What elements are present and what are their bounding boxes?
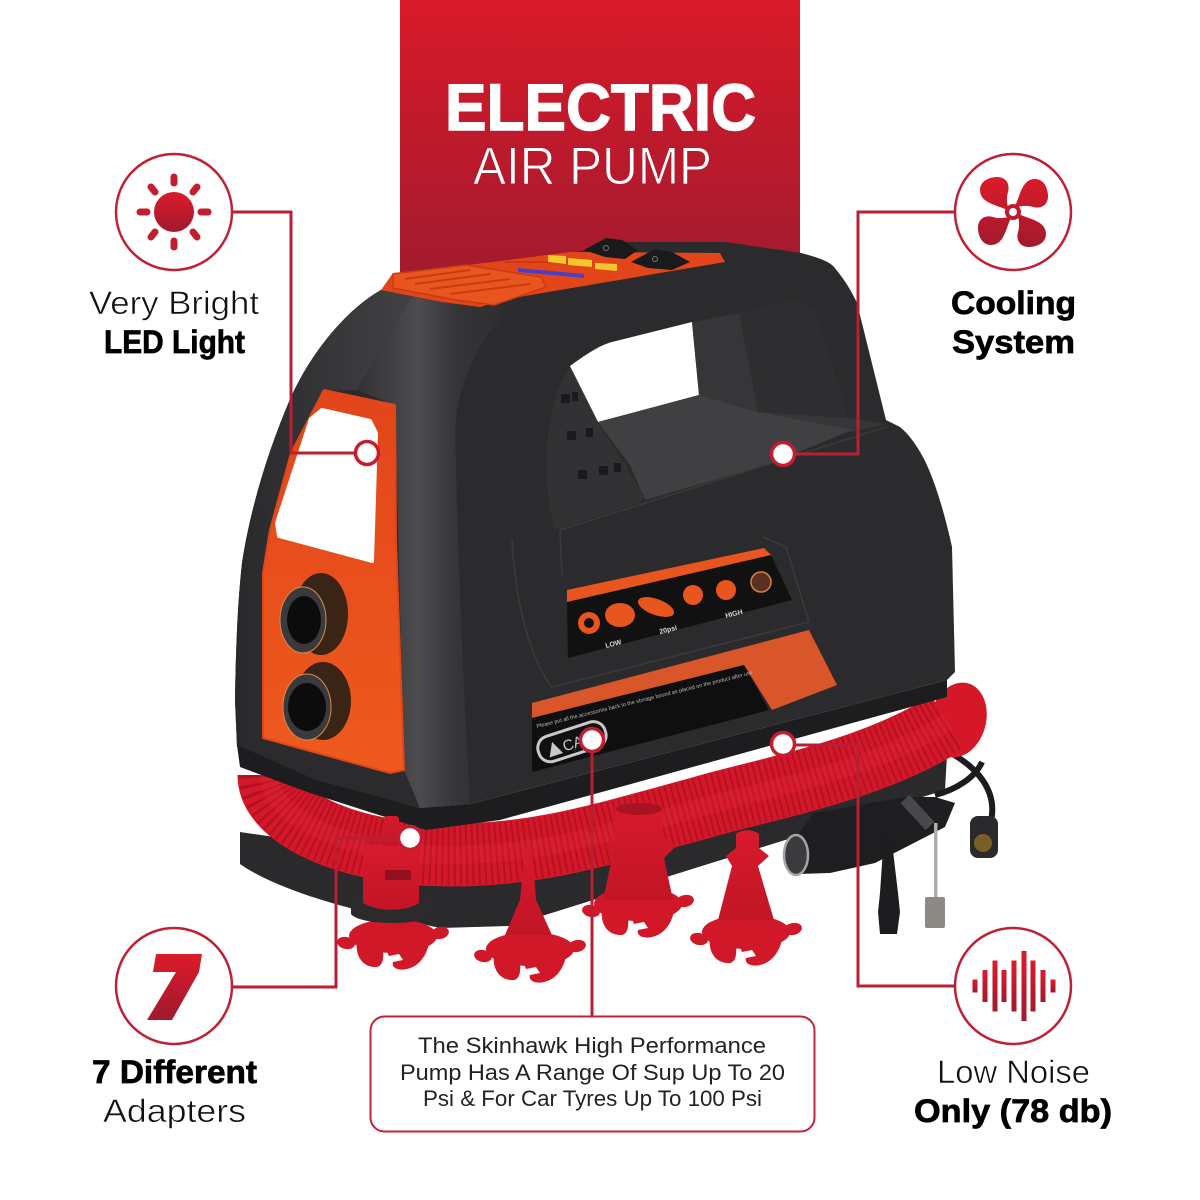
connector: low noise <box>772 732 955 986</box>
feature: cooling system <box>951 154 1076 360</box>
LED lens <box>277 410 376 561</box>
handle opening <box>570 322 699 422</box>
label: LED Light <box>104 324 245 360</box>
upper product label: 20psi <box>659 625 678 636</box>
icon: seven <box>116 928 232 1044</box>
needle valve <box>925 823 945 928</box>
connector: cooling system <box>772 212 955 466</box>
feature: adapters <box>92 928 257 1129</box>
body highlight <box>357 293 520 808</box>
grip tray <box>393 265 546 305</box>
subtitle: air pump: AIR PUMP <box>473 137 712 196</box>
orange front panel <box>263 390 404 773</box>
yellow buttons <box>548 255 617 271</box>
connector: LED light <box>232 212 378 464</box>
adapter 1 <box>336 816 450 970</box>
cone nozzle <box>878 834 900 934</box>
hose connector <box>970 816 998 858</box>
upper product label: HIGH <box>725 609 743 620</box>
vent panel <box>547 367 645 530</box>
icon: sound wave <box>955 928 1071 1044</box>
upper product label <box>567 548 792 658</box>
adapter 3 <box>581 803 695 938</box>
car plug <box>784 797 955 875</box>
connector: adapters <box>232 826 422 987</box>
label <box>914 1054 1112 1129</box>
label: 7 Different <box>92 1054 257 1090</box>
feature: low noise <box>914 928 1112 1129</box>
caution badge: CAU <box>561 729 596 755</box>
upper product label: LOW <box>605 639 623 650</box>
label: Low Noise <box>937 1054 1090 1090</box>
lower product label: Please put all the accessories back to the storage bound as placed on the product after use <box>536 670 753 730</box>
label: Adapters <box>103 1093 246 1129</box>
rocker switch 1 <box>584 238 638 259</box>
icon: sun <box>116 154 232 270</box>
display <box>518 268 584 278</box>
handle inner shadow <box>739 300 848 418</box>
icon: fan <box>955 154 1071 270</box>
label: Only (78 db) <box>914 1093 1112 1129</box>
lower base plate <box>240 755 947 928</box>
label <box>951 285 1076 360</box>
red coiled hose <box>269 676 995 855</box>
top control cap <box>381 238 725 307</box>
product: electric air pump <box>235 238 998 983</box>
pump main body <box>235 242 955 808</box>
callout: The Skinhawk High Performance <box>418 1033 766 1058</box>
label: Cooling <box>951 285 1076 321</box>
lower product label <box>532 630 837 772</box>
body base strip <box>237 680 947 830</box>
callout: Psi & For Car Tyres Up To 100 Psi <box>423 1086 762 1111</box>
adapter 2 <box>473 848 587 983</box>
cable <box>935 750 992 825</box>
title: electric: ELECTRIC <box>445 70 756 144</box>
connector: callout <box>580 728 604 1016</box>
handle tray <box>598 395 852 500</box>
adapter 4 <box>689 830 803 966</box>
left shell <box>235 290 414 747</box>
handle inner <box>692 300 886 432</box>
caution badge <box>535 719 609 765</box>
label: System <box>952 324 1075 360</box>
rocker switch 2 <box>631 249 690 270</box>
label <box>92 1054 257 1129</box>
port lower <box>283 662 351 740</box>
port upper <box>280 573 348 655</box>
label: Very Bright <box>89 285 259 321</box>
label <box>89 285 259 360</box>
title banner <box>400 0 800 275</box>
callout <box>370 1016 814 1132</box>
callout: Pump Has A Range Of Sup Up To 20 <box>400 1060 785 1085</box>
recess edge <box>512 427 886 687</box>
feature: LED light <box>89 154 259 360</box>
